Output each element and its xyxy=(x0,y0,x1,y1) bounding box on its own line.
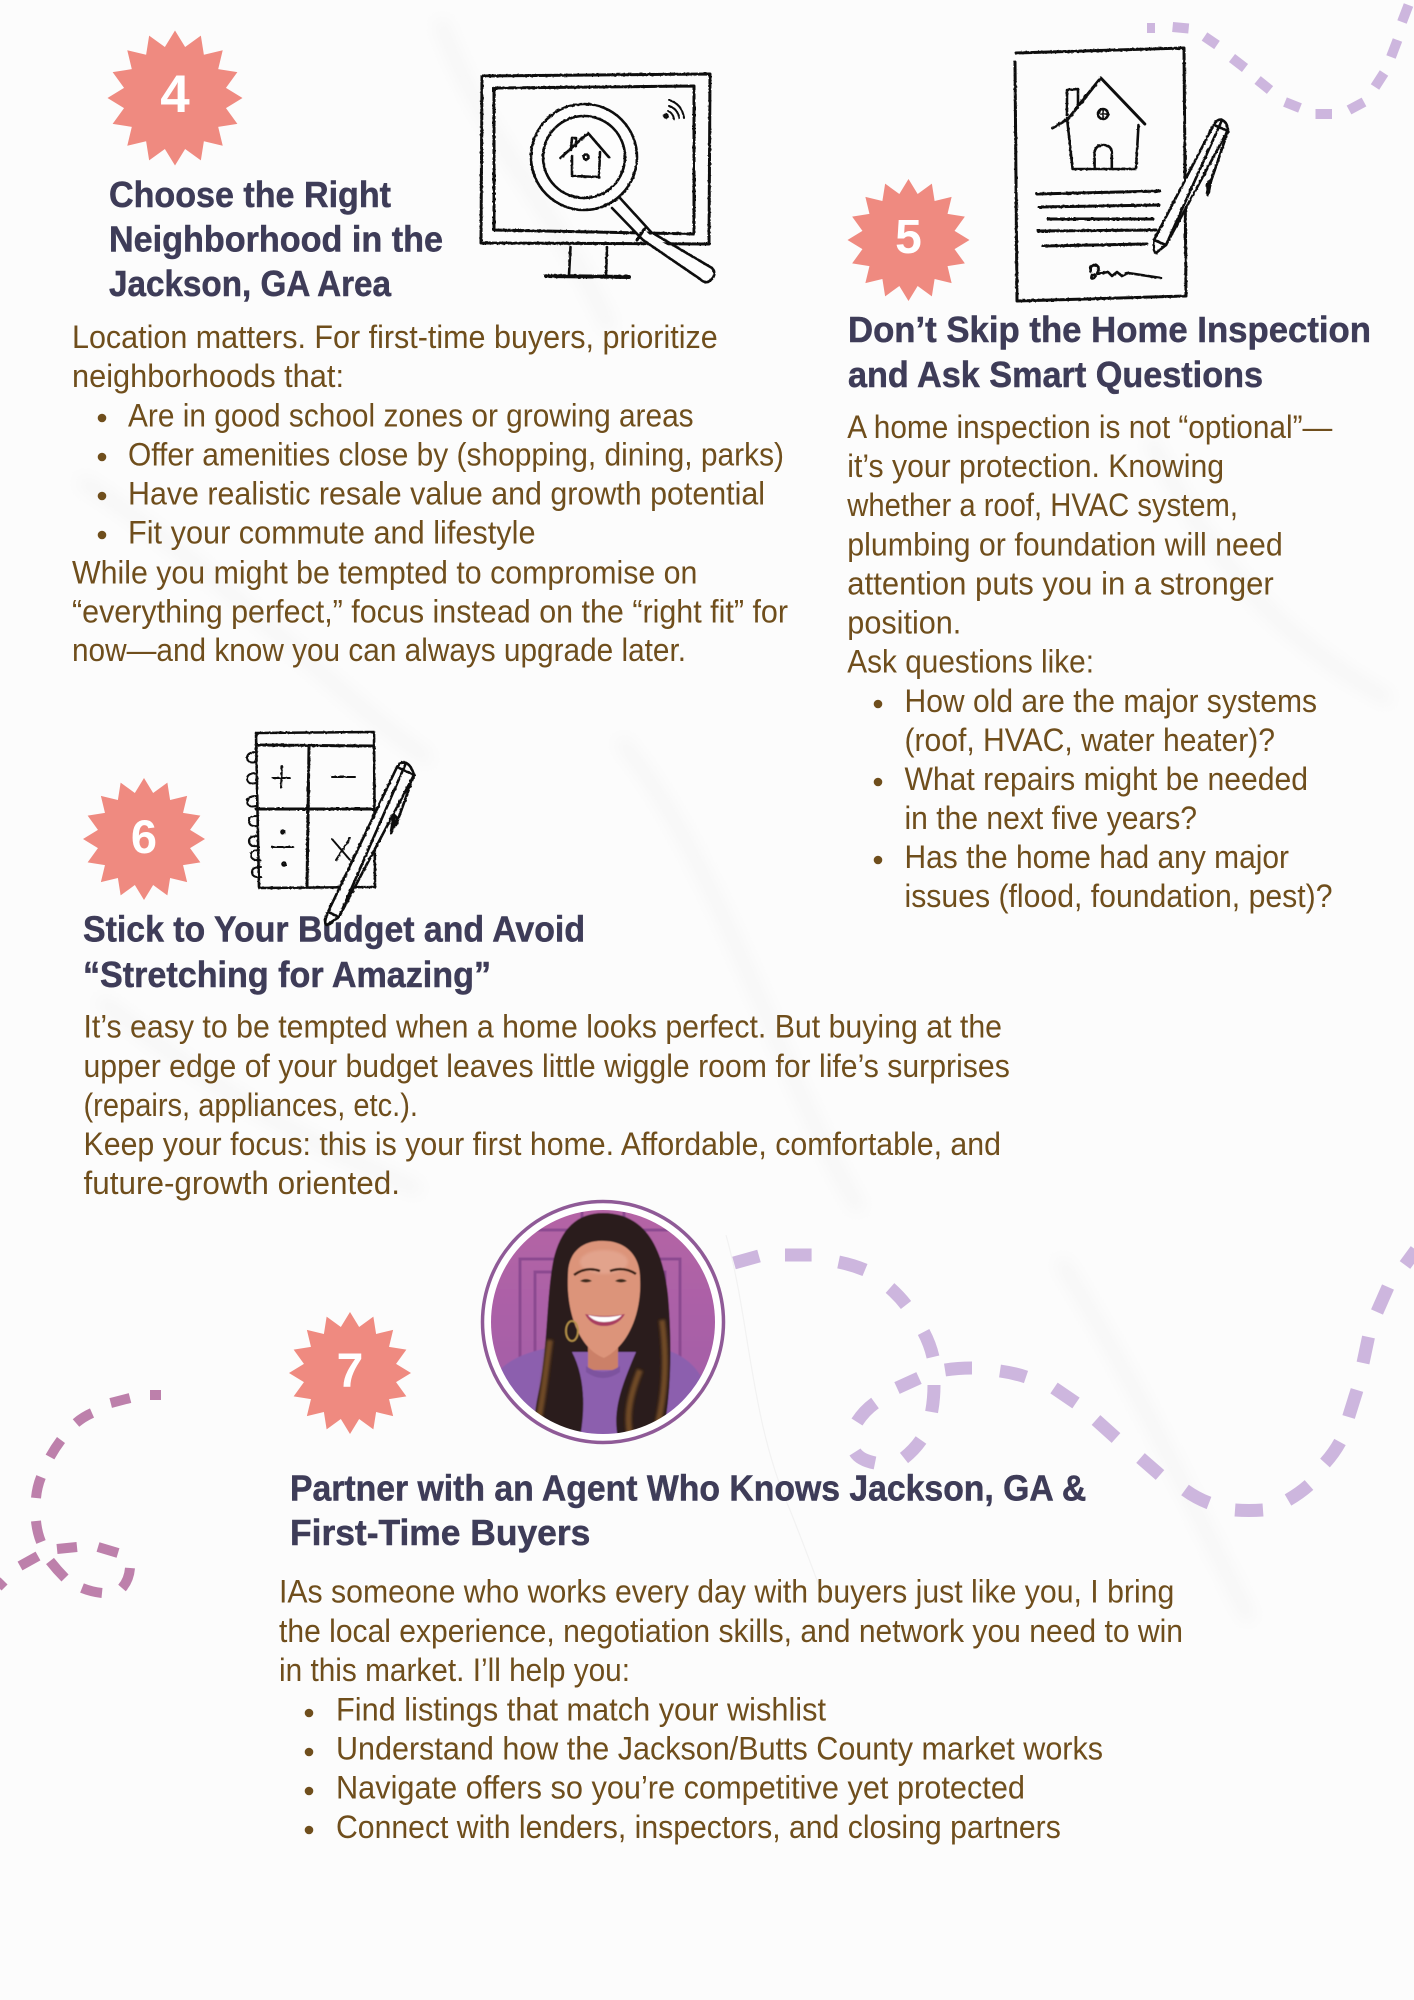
text: step 7 body: the local experience, negotiation skills, and network you need to win xyxy=(279,1613,1183,1649)
badge: number 6: 6 xyxy=(131,810,157,863)
text: step 7 body: Understand how the Jackson/Butts County market works xyxy=(336,1730,1103,1766)
text: step 4 body: Location matters. For first-time buyers, prioritize xyxy=(72,319,718,355)
decoration: dashed path lower left xyxy=(0,1395,161,1593)
text: step 4 body: Offer amenities close by (shopping, dining, parks) xyxy=(128,436,784,472)
heading: step 7 xyxy=(290,1468,1086,1553)
heading: step 7: First-Time Buyers xyxy=(290,1512,590,1553)
text: step 4 body: Are in good school zones or growing areas xyxy=(128,398,694,434)
heading: step 5: and Ask Smart Questions xyxy=(848,354,1263,395)
text: step 6 body: (repairs, appliances, etc.). xyxy=(84,1087,418,1123)
text: step 5 body: (roof, HVAC, water heater)? xyxy=(904,722,1275,758)
badge: number 7: 7 xyxy=(337,1345,363,1398)
text: step 6 body: It’s easy to be tempted when a home looks perfect. But buying at the xyxy=(84,1009,1002,1045)
text: step 6 body xyxy=(84,1009,1010,1201)
text: step 4 body: “everything perfect,” focus instead on the “right fit” for xyxy=(72,594,788,630)
text: step 5 body: How old are the major systems xyxy=(904,683,1317,719)
text: step 7 body: IAs someone who works every day with buyers just like you, I bring xyxy=(279,1574,1174,1610)
text: step 5 body: attention puts you in a stronger xyxy=(847,566,1274,602)
panel: step 6 budget xyxy=(83,732,1010,1201)
text: step 7 body: Find listings that match your wishlist xyxy=(336,1692,826,1728)
decoration: dashed path lower right xyxy=(734,1250,1414,1510)
text: step 7 body: Navigate offers so you’re competitive yet protected xyxy=(336,1770,1025,1806)
text: step 6 body: upper edge of your budget leaves little wiggle room for life’s surprises xyxy=(84,1048,1010,1084)
heading: step 4: Neighborhood in the xyxy=(109,218,443,260)
text: step 5 body: plumbing or foundation will need xyxy=(847,526,1283,562)
text: step 7 body: in this market. I’ll help you: xyxy=(279,1652,630,1688)
badge: number 5: 5 xyxy=(895,211,922,264)
heading: step 4 xyxy=(109,174,443,304)
heading: step 5: Don’t Skip the Home Inspection xyxy=(848,309,1371,350)
photo: agent portrait xyxy=(482,1202,724,1442)
text: step 6 body: Keep your focus: this is your first home. Affordable, comfortable, and xyxy=(84,1126,1001,1162)
text: step 5 body: it’s your protection. Knowing xyxy=(847,448,1224,484)
heading: step 5 xyxy=(848,309,1371,395)
text: step 4 body: While you might be tempted to compromise on xyxy=(72,554,697,590)
badge: number 4 xyxy=(108,30,242,165)
text: step 5 body: in the next five years? xyxy=(904,800,1197,836)
text: step 4 body: Fit your commute and lifestyle xyxy=(128,514,536,550)
panel: step 4 neighborhood xyxy=(72,30,788,668)
decoration: dashed path top right xyxy=(1147,5,1408,114)
panel: step 5 home inspection xyxy=(846,48,1371,914)
heading: step 4: Jackson, GA Area xyxy=(109,263,392,304)
heading: step 4: Choose the Right xyxy=(109,174,391,215)
icon: document with house and pen xyxy=(1015,48,1228,301)
panel: step 7 agent xyxy=(279,1202,1183,1845)
text: step 5 body: A home inspection is not “optional”— xyxy=(847,409,1332,445)
text: step 7 body xyxy=(279,1574,1183,1845)
text: step 5 body: Has the home had any major xyxy=(904,839,1289,875)
text: step 7 body: Connect with lenders, inspectors, and closing partners xyxy=(336,1809,1061,1845)
icon: calculator notebook and pen xyxy=(247,732,414,925)
heading: step 6 xyxy=(83,908,585,995)
text: step 4 body xyxy=(72,319,788,668)
heading: step 6: Stick to Your Budget and Avoid xyxy=(83,908,585,950)
heading: step 6: “Stretching for Amazing” xyxy=(83,954,491,995)
icon: monitor with magnifier and house xyxy=(481,74,715,283)
text: step 4 body: now—and know you can always upgrade later. xyxy=(72,632,686,668)
text: step 5 body: issues (flood, foundation, pest)? xyxy=(904,878,1332,914)
text: step 4 body: Have realistic resale value and growth potential xyxy=(128,476,765,512)
text: step 5 body xyxy=(846,409,1332,914)
text: step 5 body: whether a roof, HVAC system, xyxy=(846,487,1238,523)
badge: number 6 xyxy=(83,778,205,900)
text: step 6 body: future-growth oriented. xyxy=(84,1165,400,1201)
text: step 5 body: What repairs might be needed xyxy=(904,761,1308,797)
text: step 5 body: position. xyxy=(847,605,961,641)
badge: number 7 xyxy=(289,1312,411,1434)
badge: number 5 xyxy=(848,179,970,301)
text: step 5 body: Ask questions like: xyxy=(847,644,1094,680)
heading: step 7: Partner with an Agent Who Knows Jackson, GA & xyxy=(290,1468,1086,1509)
text: step 4 body: neighborhoods that: xyxy=(72,358,344,394)
badge: number 4: 4 xyxy=(160,65,190,124)
